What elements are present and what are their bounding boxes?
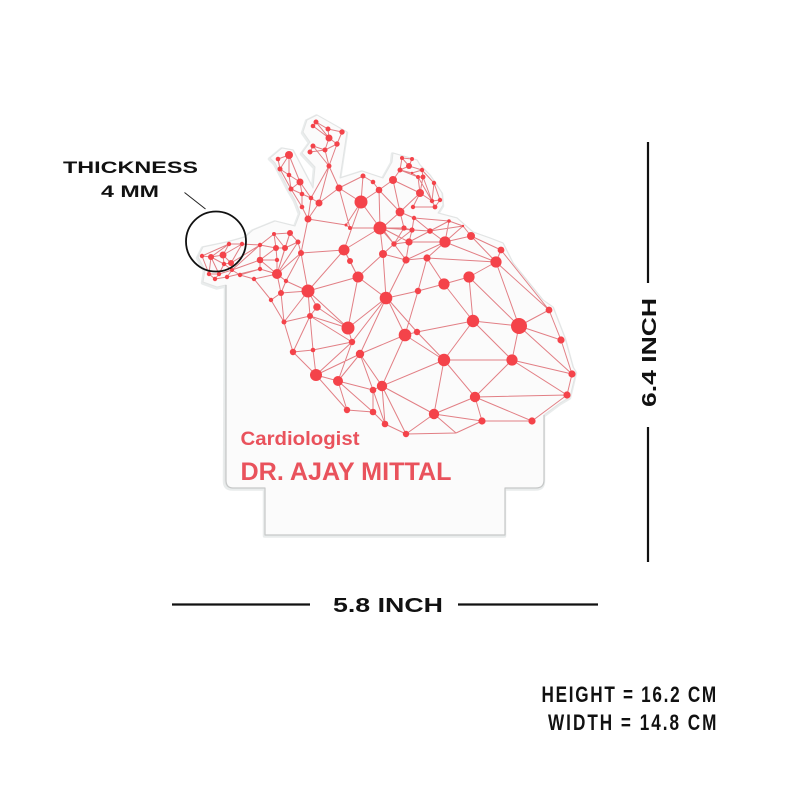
metric dimensions text block: [542, 683, 716, 736]
heart network: nodes: [200, 120, 576, 437]
heart network: connecting lines: [202, 122, 572, 434]
width arrow line left: [172, 603, 310, 606]
width label: 5.8 INCH: [333, 594, 443, 617]
callout magnifier circle: [186, 212, 246, 272]
metric width: WIDTH = 14.8 CM: [548, 711, 716, 736]
callout leader line: [184, 192, 206, 209]
metric height: HEIGHT = 16.2 CM: [542, 683, 716, 708]
height arrow line bottom: [647, 427, 649, 562]
plaque outline: heart shaped acrylic with stepped base: [198, 115, 576, 536]
width arrow line right: [458, 603, 598, 606]
callout value: 4 MM: [101, 183, 159, 201]
height arrow line top: [647, 142, 649, 283]
callout label: THICKNESS: [63, 159, 198, 177]
specialty label: Cardiologist: [240, 428, 360, 450]
callout: thickness: [63, 159, 246, 272]
panel: acrylic plaque: [198, 115, 576, 536]
height label: 6.4 INCH: [639, 298, 661, 407]
doctor name: DR. AJAY MITTAL: [240, 458, 452, 486]
